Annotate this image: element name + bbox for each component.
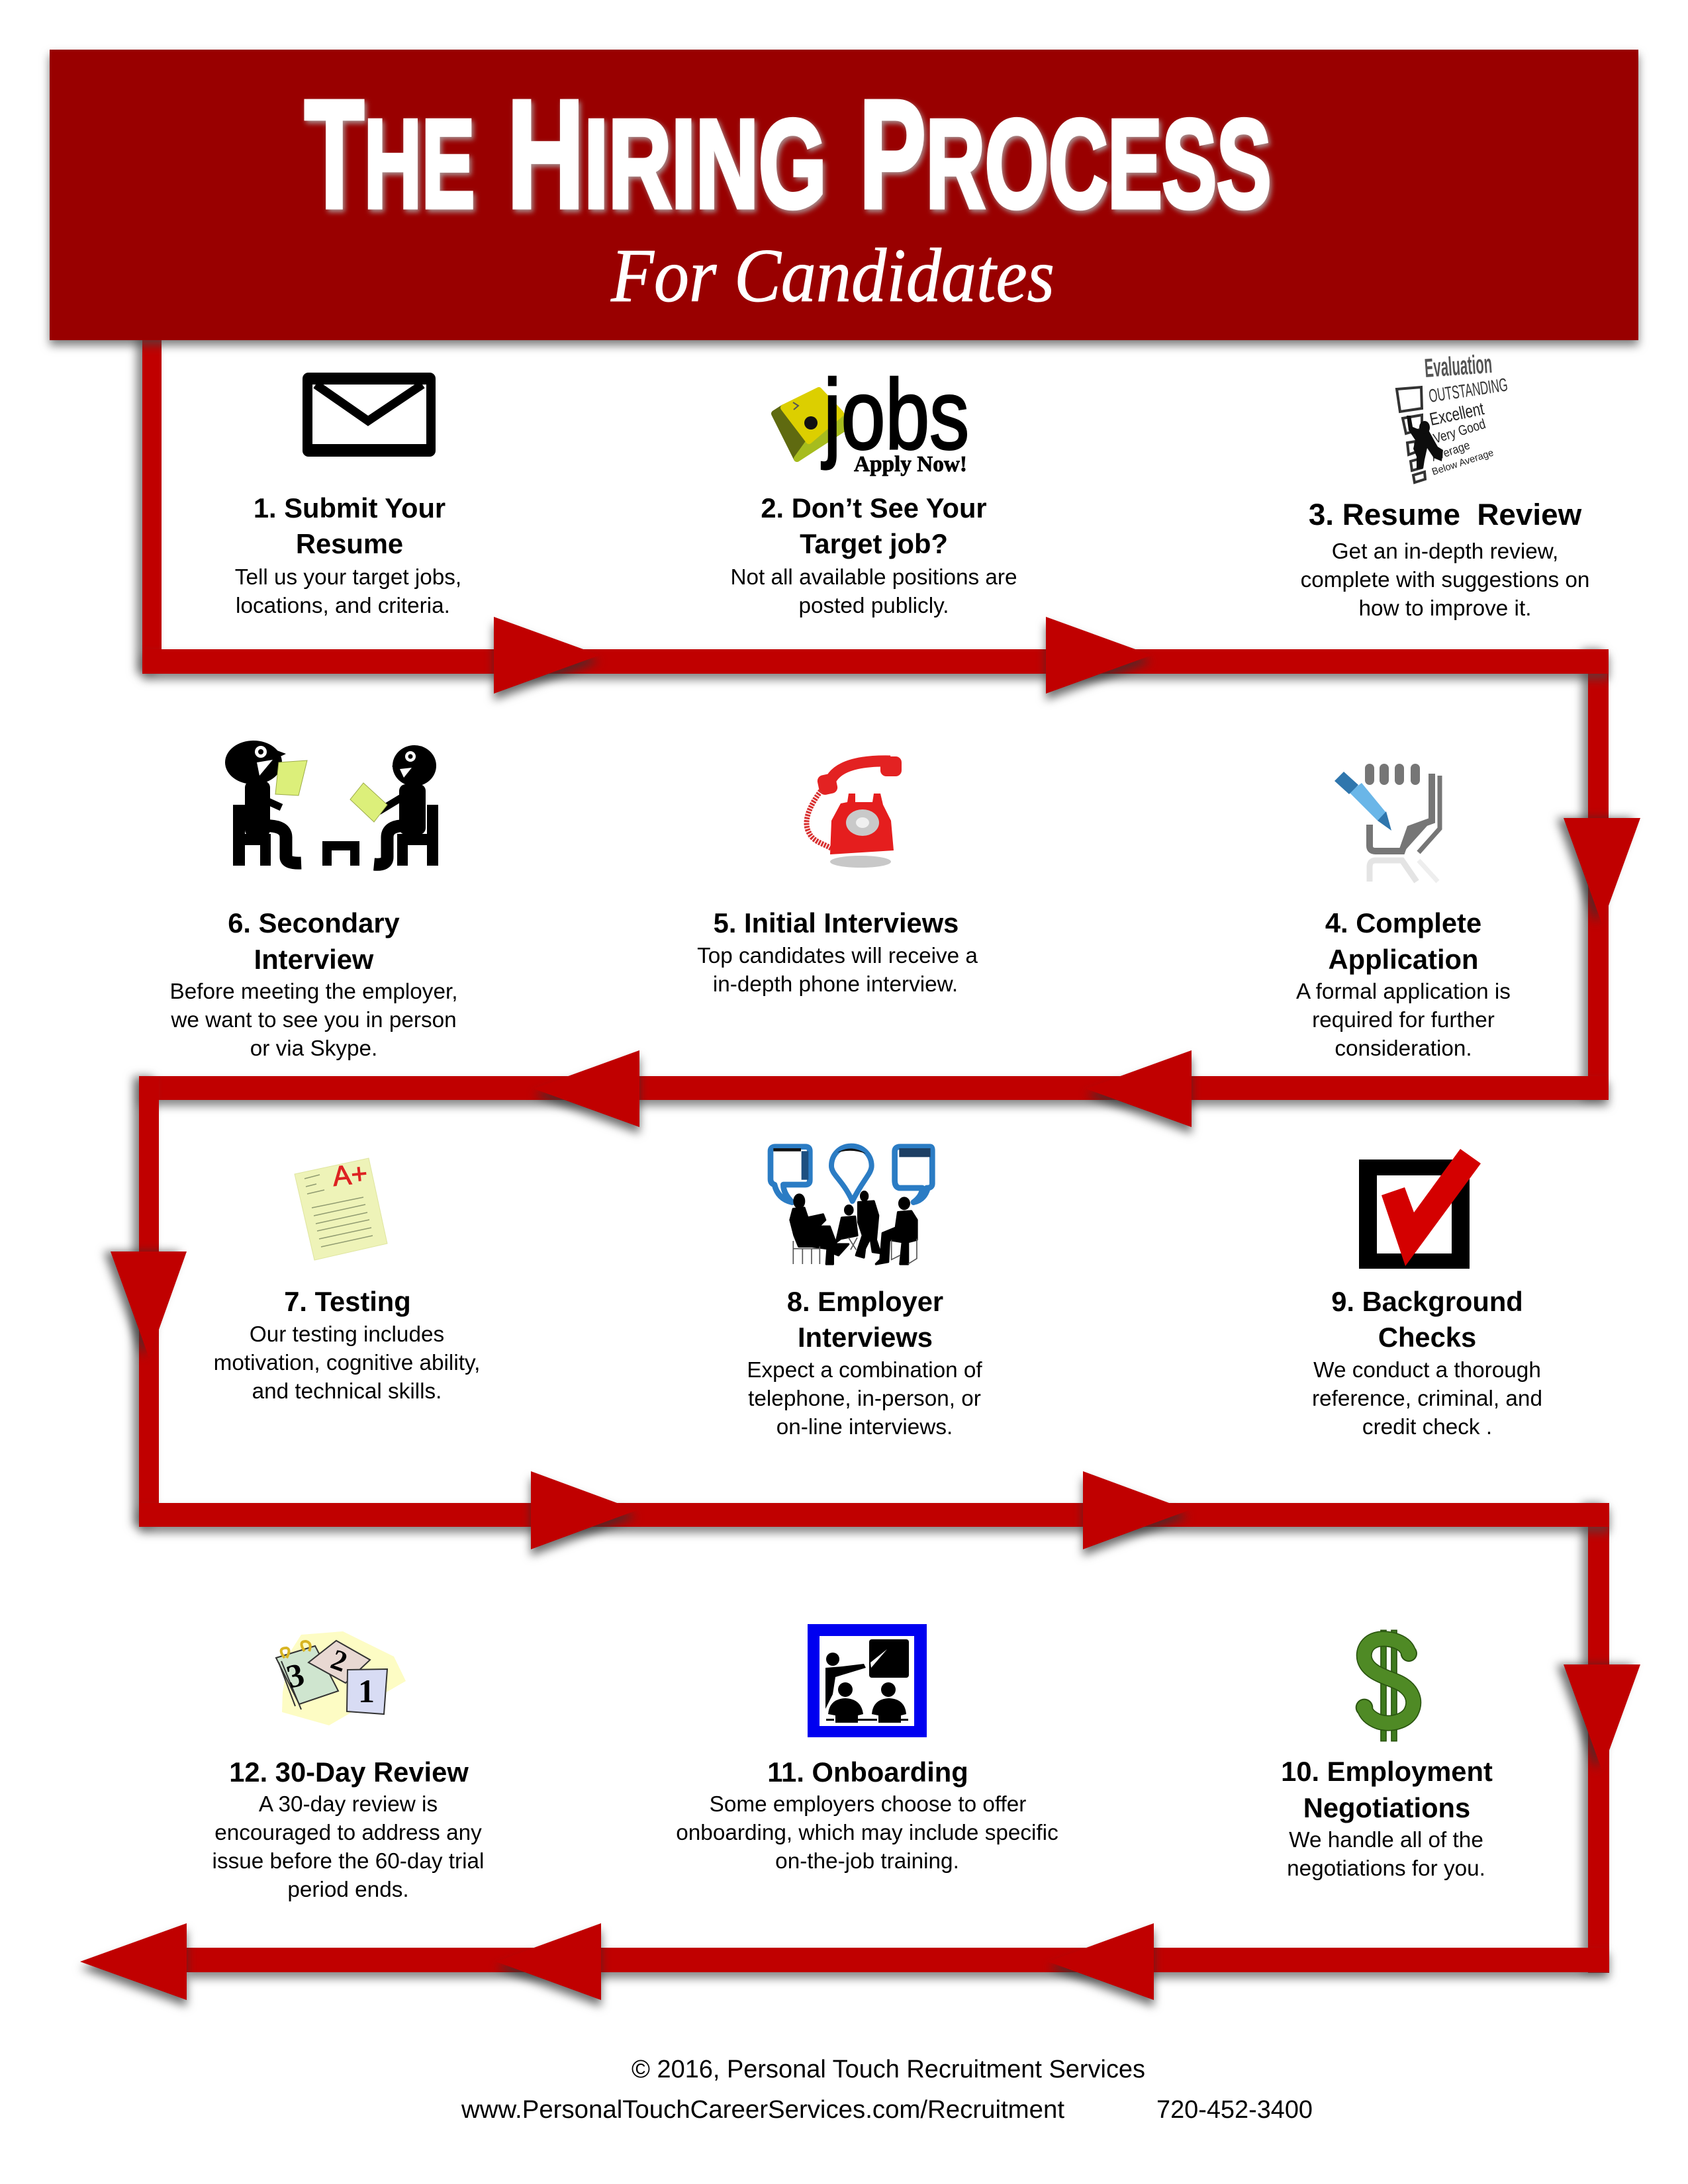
- heading: Target job?: [800, 528, 948, 559]
- body text: reference, criminal, and: [1312, 1387, 1542, 1411]
- title banner: [50, 50, 1638, 340]
- arrow: down to row 3: [111, 1251, 187, 1357]
- icon: calendar pages 3 2 1: 3: [283, 1655, 308, 1696]
- body text: required for further: [1312, 1008, 1495, 1032]
- icon: evaluation checklist: Evaluation: [1424, 349, 1493, 383]
- body text: A formal application is: [1296, 979, 1511, 1004]
- step 9: background checks: [1312, 1149, 1542, 1439]
- icon: two people reading resumes: [225, 741, 438, 866]
- heading: 11. Onboarding: [767, 1756, 968, 1788]
- body text: encouraged to address any: [214, 1821, 482, 1845]
- heading: Application: [1329, 944, 1478, 975]
- body text: Before meeting the employer,: [170, 979, 457, 1004]
- body text: how to improve it.: [1359, 596, 1531, 621]
- icon: jobs key: Apply Now!: [854, 452, 967, 477]
- arrow: row 1 first: [494, 617, 600, 694]
- icon: evaluation checklist: Very Good: [1432, 416, 1487, 447]
- body text: locations, and criteria.: [236, 594, 450, 618]
- phone number: 720-452-3400: [1156, 2096, 1313, 2124]
- body text: and technical skills.: [252, 1379, 442, 1404]
- body text: We conduct a thorough: [1313, 1358, 1541, 1383]
- website: www.PersonalTouchCareerServices.com/Recruitment: [461, 2096, 1064, 2124]
- icon: calendar pages 3 2 1: [276, 1631, 406, 1725]
- arrow: down to row 4: [1564, 1664, 1640, 1770]
- body text: telephone, in-person, or: [748, 1387, 981, 1411]
- body text: we want to see you in person: [170, 1008, 457, 1032]
- arrow: row 1 second: [1046, 617, 1152, 694]
- body text: Some employers choose to offer: [710, 1792, 1026, 1817]
- step 8: employer interviews: [747, 1146, 982, 1439]
- step 2: don't see your target job: [730, 359, 1017, 618]
- banner background: [50, 50, 1638, 340]
- arrow: row 3 second: [1083, 1471, 1189, 1549]
- title: HIRING: [507, 69, 827, 240]
- arrow: row 4 first: [1048, 1923, 1154, 2000]
- icon: teacher and students in blue frame: [808, 1624, 927, 1737]
- icon: silhouettes with speech bubbles: [771, 1146, 932, 1264]
- body text: A 30-day review is: [259, 1792, 438, 1817]
- body text: credit check .: [1362, 1415, 1492, 1439]
- arrow: row 4 end: [80, 1923, 187, 2000]
- icon: envelope: [303, 373, 436, 457]
- step 12: 30-day review: [212, 1631, 484, 1902]
- body text: Expect a combination of: [747, 1358, 982, 1383]
- heading: Interviews: [798, 1322, 933, 1353]
- step 10: employment negotiations: [1281, 1630, 1493, 1881]
- step 7: testing: [214, 1158, 480, 1404]
- body text: period ends.: [287, 1878, 409, 1902]
- heading: 4. Complete: [1325, 907, 1481, 938]
- title: [305, 68, 1271, 240]
- heading: Interview: [254, 944, 374, 975]
- heading: 2. Don’t See Your: [761, 492, 987, 523]
- icon: red telephone: [806, 756, 902, 868]
- heading: Resume: [296, 528, 403, 559]
- icon: graded paper A+: A+: [331, 1158, 369, 1192]
- heading: 10. Employment: [1281, 1756, 1493, 1787]
- icon: calendar pages 3 2 1: 2: [327, 1643, 352, 1678]
- icon: jobs key: jobs: [821, 359, 969, 470]
- process path: connected red bars: [139, 331, 1609, 1973]
- heading: 7. Testing: [284, 1286, 411, 1317]
- body text: in-depth phone interview.: [713, 972, 958, 997]
- body text: Not all available positions are: [730, 565, 1017, 590]
- arrow: row 2 first: [1086, 1050, 1192, 1127]
- body text: posted publicly.: [798, 594, 949, 618]
- icon: evaluation checklist: [1397, 349, 1509, 482]
- body text: motivation, cognitive ability,: [214, 1351, 480, 1375]
- body text: Top candidates will receive a: [697, 944, 978, 968]
- icon: green dollar sign: [1356, 1630, 1417, 1741]
- heading: 8. Employer: [787, 1286, 943, 1317]
- icon: calendar pages 3 2 1: 1: [358, 1672, 375, 1709]
- body text: consideration.: [1335, 1036, 1472, 1061]
- heading: 5. Initial Interviews: [714, 907, 959, 938]
- arrow: row 2 second: [534, 1050, 639, 1127]
- body text: on-the-job training.: [775, 1849, 959, 1874]
- step 5: initial interviews: [697, 756, 978, 997]
- copyright line: © 2016, Personal Touch Recruitment Services: [632, 2056, 1145, 2083]
- heading: 9. Background: [1331, 1286, 1523, 1317]
- step 6: secondary interview: [170, 741, 457, 1061]
- title: PROCESS: [859, 68, 1271, 240]
- icon: check box: [1359, 1149, 1481, 1269]
- subtitle: For Candidates: [610, 234, 1055, 318]
- heading: 6. Secondary: [228, 907, 400, 938]
- step 4: complete application: [1296, 764, 1511, 1061]
- body text: onboarding, which may include specific: [676, 1821, 1058, 1845]
- arrow: row 3 first: [531, 1471, 637, 1549]
- heading: 3. Resume Review: [1309, 498, 1582, 531]
- body text: issue before the 60-day trial: [212, 1849, 484, 1874]
- step 11: onboarding: [676, 1624, 1058, 1874]
- body text: complete with suggestions on: [1301, 568, 1589, 592]
- body text: Get an in-depth review,: [1332, 539, 1558, 564]
- icon: evaluation checklist: Excellent: [1428, 398, 1486, 430]
- heading: 1. Submit Your: [254, 492, 445, 523]
- body text: Tell us your target jobs,: [235, 565, 461, 590]
- icon: evaluation checklist: Average: [1430, 438, 1472, 464]
- footer: [461, 2056, 1313, 2124]
- arrow: down to row 2: [1564, 818, 1640, 924]
- arrow: row 4 second: [496, 1923, 601, 2000]
- step 1: submit your resume: [235, 373, 461, 618]
- heading: 12. 30-Day Review: [229, 1756, 469, 1788]
- heading: Negotiations: [1303, 1792, 1470, 1823]
- step 3: resume review: [1301, 349, 1589, 621]
- body text: negotiations for you.: [1287, 1856, 1485, 1881]
- body text: on-line interviews.: [776, 1415, 953, 1439]
- icon: pencil and notepad: [1335, 764, 1440, 882]
- heading: Checks: [1378, 1322, 1476, 1353]
- body text: or via Skype.: [250, 1036, 377, 1061]
- icon: graded paper A+: [295, 1158, 387, 1260]
- body text: Our testing includes: [250, 1322, 444, 1347]
- body text: We handle all of the: [1289, 1828, 1483, 1852]
- icon: evaluation checklist: Below Average: [1430, 447, 1495, 478]
- icon: evaluation checklist: OUTSTANDING: [1427, 374, 1509, 406]
- title: THE: [305, 69, 475, 240]
